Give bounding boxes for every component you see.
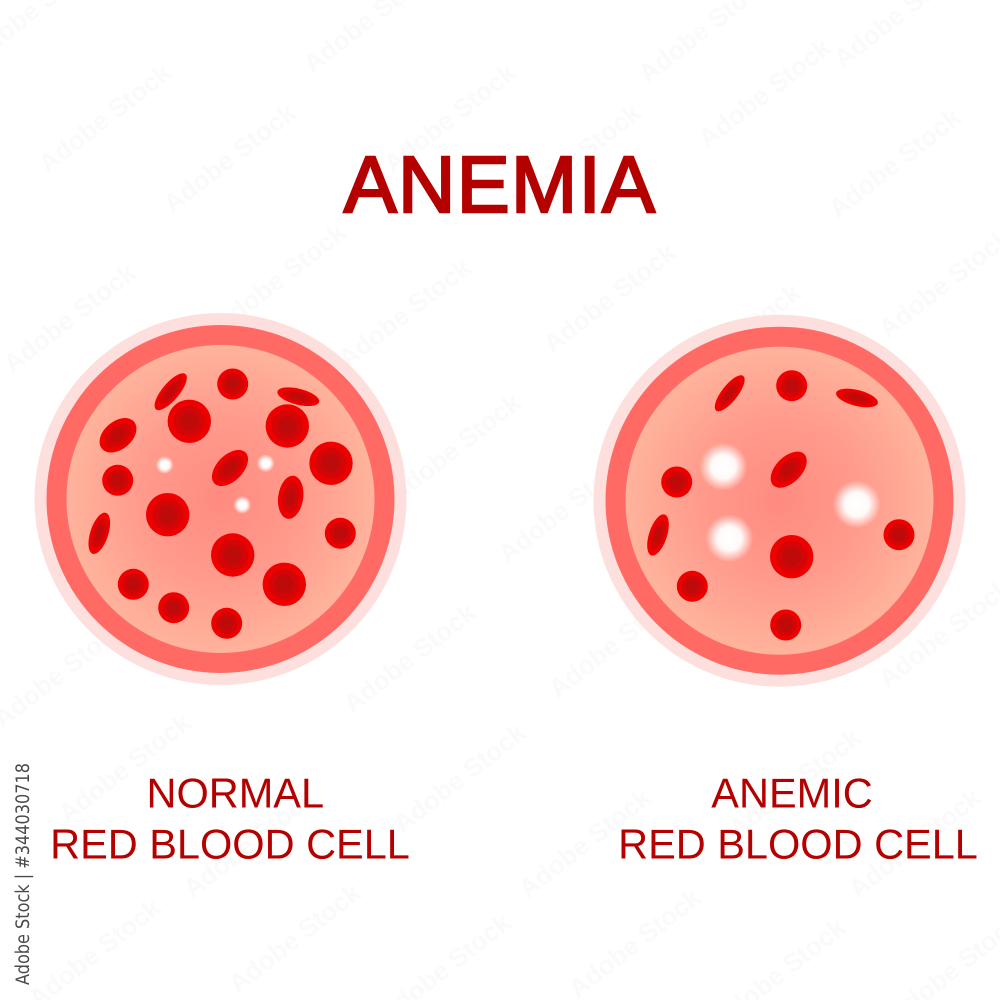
vessel halo <box>594 315 966 687</box>
watermark: Adobe Stock <box>33 57 177 179</box>
watermark: Adobe Stock <box>0 257 142 379</box>
watermark: Adobe Stock <box>338 597 482 719</box>
small round cells <box>102 368 356 639</box>
watermark: Adobe Stock <box>723 722 867 844</box>
side-on cells <box>643 371 880 558</box>
plasma <box>66 345 374 653</box>
watermark: Adobe Stock <box>693 32 837 154</box>
watermark: Adobe Stock <box>223 877 367 999</box>
watermark: Adobe Stock <box>538 237 682 359</box>
watermark: Adobe Stock <box>378 57 522 179</box>
watermark: Adobe Stock <box>383 387 527 509</box>
side-on cells <box>84 369 321 557</box>
plasma <box>626 347 934 655</box>
watermark: Adobe Stock <box>493 447 637 569</box>
label: anemic: ANEMIC <box>711 769 873 816</box>
watermark: Adobe Stock <box>178 782 322 904</box>
watermark: Adobe Stock <box>208 217 352 339</box>
large round cells <box>146 400 353 606</box>
label: red blood cell (anemic): RED BLOOD CELL <box>618 820 978 867</box>
large round cell <box>770 535 813 578</box>
watermark: Adobe Stock <box>543 582 687 704</box>
small round cells <box>661 370 914 640</box>
panel: anemic red blood cell <box>594 315 966 687</box>
panel: normal red blood cell <box>34 313 406 685</box>
vessel wall <box>606 327 954 675</box>
vessel halo <box>34 313 406 685</box>
watermark: Adobe Stock <box>53 707 197 829</box>
watermark: Adobe Stock <box>843 782 987 904</box>
watermark: Adobe Stock <box>513 782 657 904</box>
vessel wall <box>46 325 394 673</box>
watermark: Adobe Stock <box>388 717 532 839</box>
label: normal: NORMAL <box>147 769 324 816</box>
title: ANEMIA <box>344 140 656 229</box>
watermark: Adobe Stock <box>663 277 807 399</box>
watermark: Adobe Stock <box>333 252 477 374</box>
stock id: Adobe Stock | #344030718 <box>13 763 34 985</box>
watermark: Adobe Stock <box>823 102 967 224</box>
white spots <box>156 454 275 514</box>
watermark: Adobe Stock <box>503 97 647 219</box>
watermark: Adobe Stock <box>158 97 302 219</box>
white spots <box>699 443 881 562</box>
label: red blood cell (normal): RED BLOOD CELL <box>50 820 410 867</box>
